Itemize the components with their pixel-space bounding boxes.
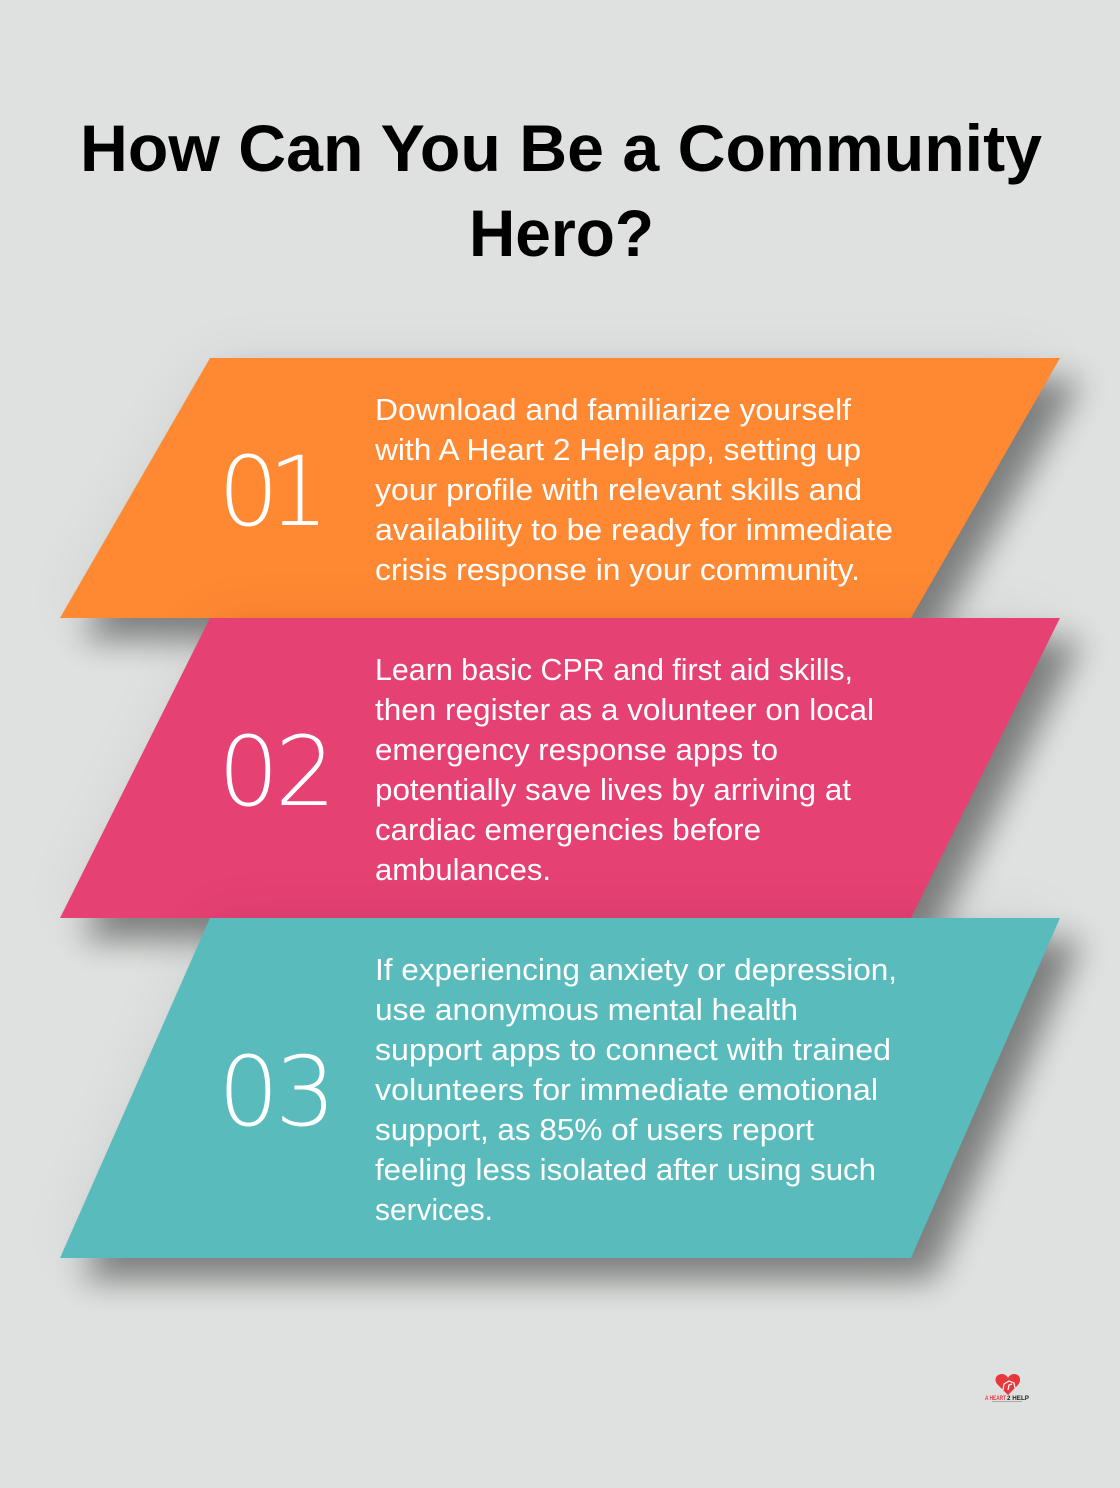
text: step 01: availability to be ready for immediate (375, 512, 893, 547)
panel: step 02 (60, 618, 1082, 940)
icon: heart (995, 1374, 1020, 1395)
panel: step 03 (60, 918, 1082, 1280)
text: step 03: feeling less isolated after using such (375, 1152, 876, 1187)
title: Hero? (469, 196, 654, 270)
text: step 02: potentially save lives by arriving at (375, 772, 851, 807)
logo: A Heart 2 Help: A HEART (985, 1395, 1006, 1402)
text: step 03: If experiencing anxiety or depression, (375, 952, 897, 987)
text: step 03 (375, 952, 897, 1227)
number 02: 02 (218, 716, 336, 828)
text: step 03: volunteers for immediate emotional (375, 1072, 878, 1107)
logo: A Heart 2 Help: 2 HELP (1007, 1395, 1030, 1402)
number 01: 01 (218, 436, 329, 548)
title (80, 111, 1042, 270)
text: step 01: Download and familiarize yourself (375, 392, 851, 427)
text: step 03: support apps to connect with trained (375, 1032, 891, 1067)
text: step 01: your profile with relevant skills and (375, 472, 862, 507)
text: step 02: emergency response apps to (375, 732, 778, 767)
title: How Can You Be a Community (80, 111, 1042, 185)
text: step 03: support, as 85% of users report (375, 1112, 814, 1147)
text: step 01 (374, 392, 893, 587)
text: step 02 (375, 652, 874, 887)
text: step 02: ambulances. (375, 852, 551, 887)
number 03: 03 (218, 1036, 336, 1148)
text: step 01: crisis response in your community. (375, 552, 860, 587)
text: step 03: services. (375, 1192, 493, 1227)
text: step 02: Learn basic CPR and first aid skills, (375, 652, 853, 687)
text: step 02: cardiac emergencies before (375, 812, 761, 847)
logo: A Heart 2 Help (985, 1374, 1030, 1402)
text: step 03: use anonymous mental health (375, 992, 798, 1027)
panel: step 01 (60, 358, 1082, 640)
text: step 02: then register as a volunteer on local (375, 692, 874, 727)
text: step 01: with A Heart 2 Help app, setting up (374, 432, 861, 467)
